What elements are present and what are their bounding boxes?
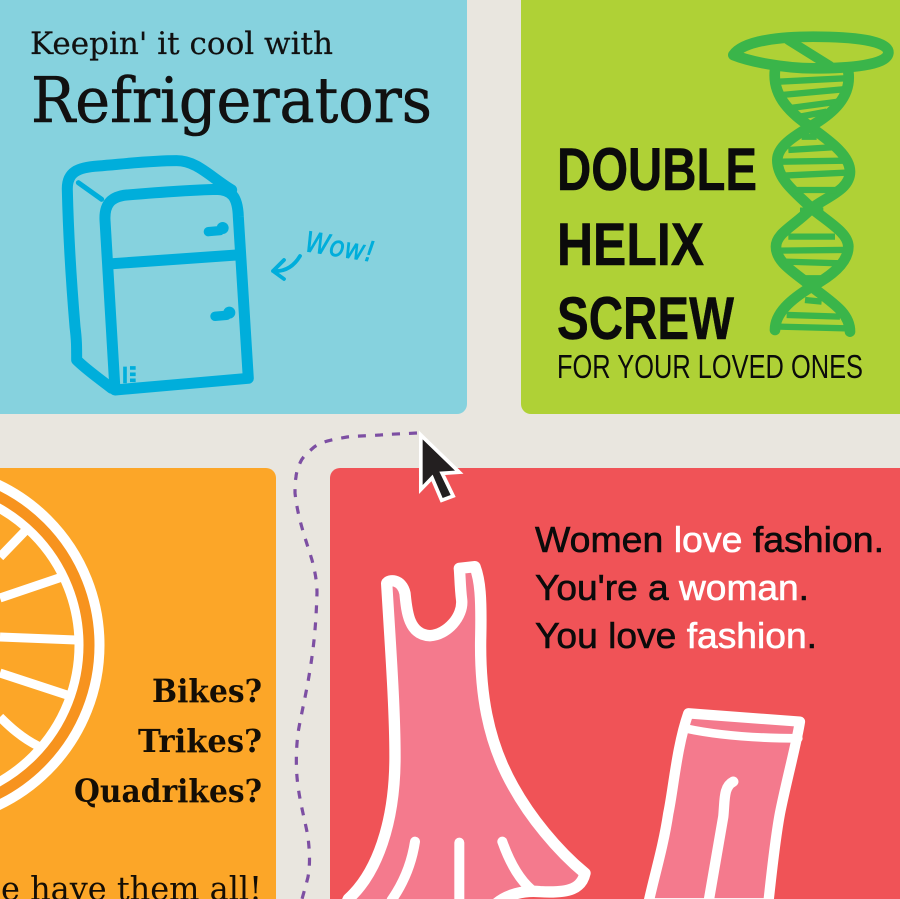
text: bikes trikes quadrikes: Quadrikes? [74,772,262,810]
text: women love fashion: You're a woman. [535,567,809,608]
panel: double helix screw [521,0,900,414]
text: women love fashion: You love fashion. [535,615,817,656]
text: bikes trikes quadrikes [74,672,262,810]
heading: keepin it cool: Keepin' it cool with [30,26,333,62]
icon: dna screw [733,37,888,332]
heading: screw: SCREW [557,285,734,352]
text: bikes trikes quadrikes: Bikes? [152,672,262,710]
text: bikes trikes quadrikes: Trikes? [138,722,262,760]
icon: dress [330,567,585,899]
heading: refrigerators: Refrigerators [31,64,432,137]
text: women love fashion: Women love fashion. [535,519,884,560]
panel: refrigerators [0,0,467,414]
icon: mouse cursor [423,439,455,498]
panel: fashion [330,468,900,899]
text: women love fashion [535,519,884,656]
panel: bikes [0,468,276,899]
icon: refrigerator [67,161,248,390]
label: wow: Wow! [303,225,377,269]
icon: bicycle wheel [0,468,100,822]
heading: helix: HELIX [557,211,704,278]
dashed cursor trail [295,433,417,899]
icon: trousers [648,713,800,899]
icon: arrow to fridge [273,256,300,279]
heading: double: DOUBLE [557,136,757,203]
